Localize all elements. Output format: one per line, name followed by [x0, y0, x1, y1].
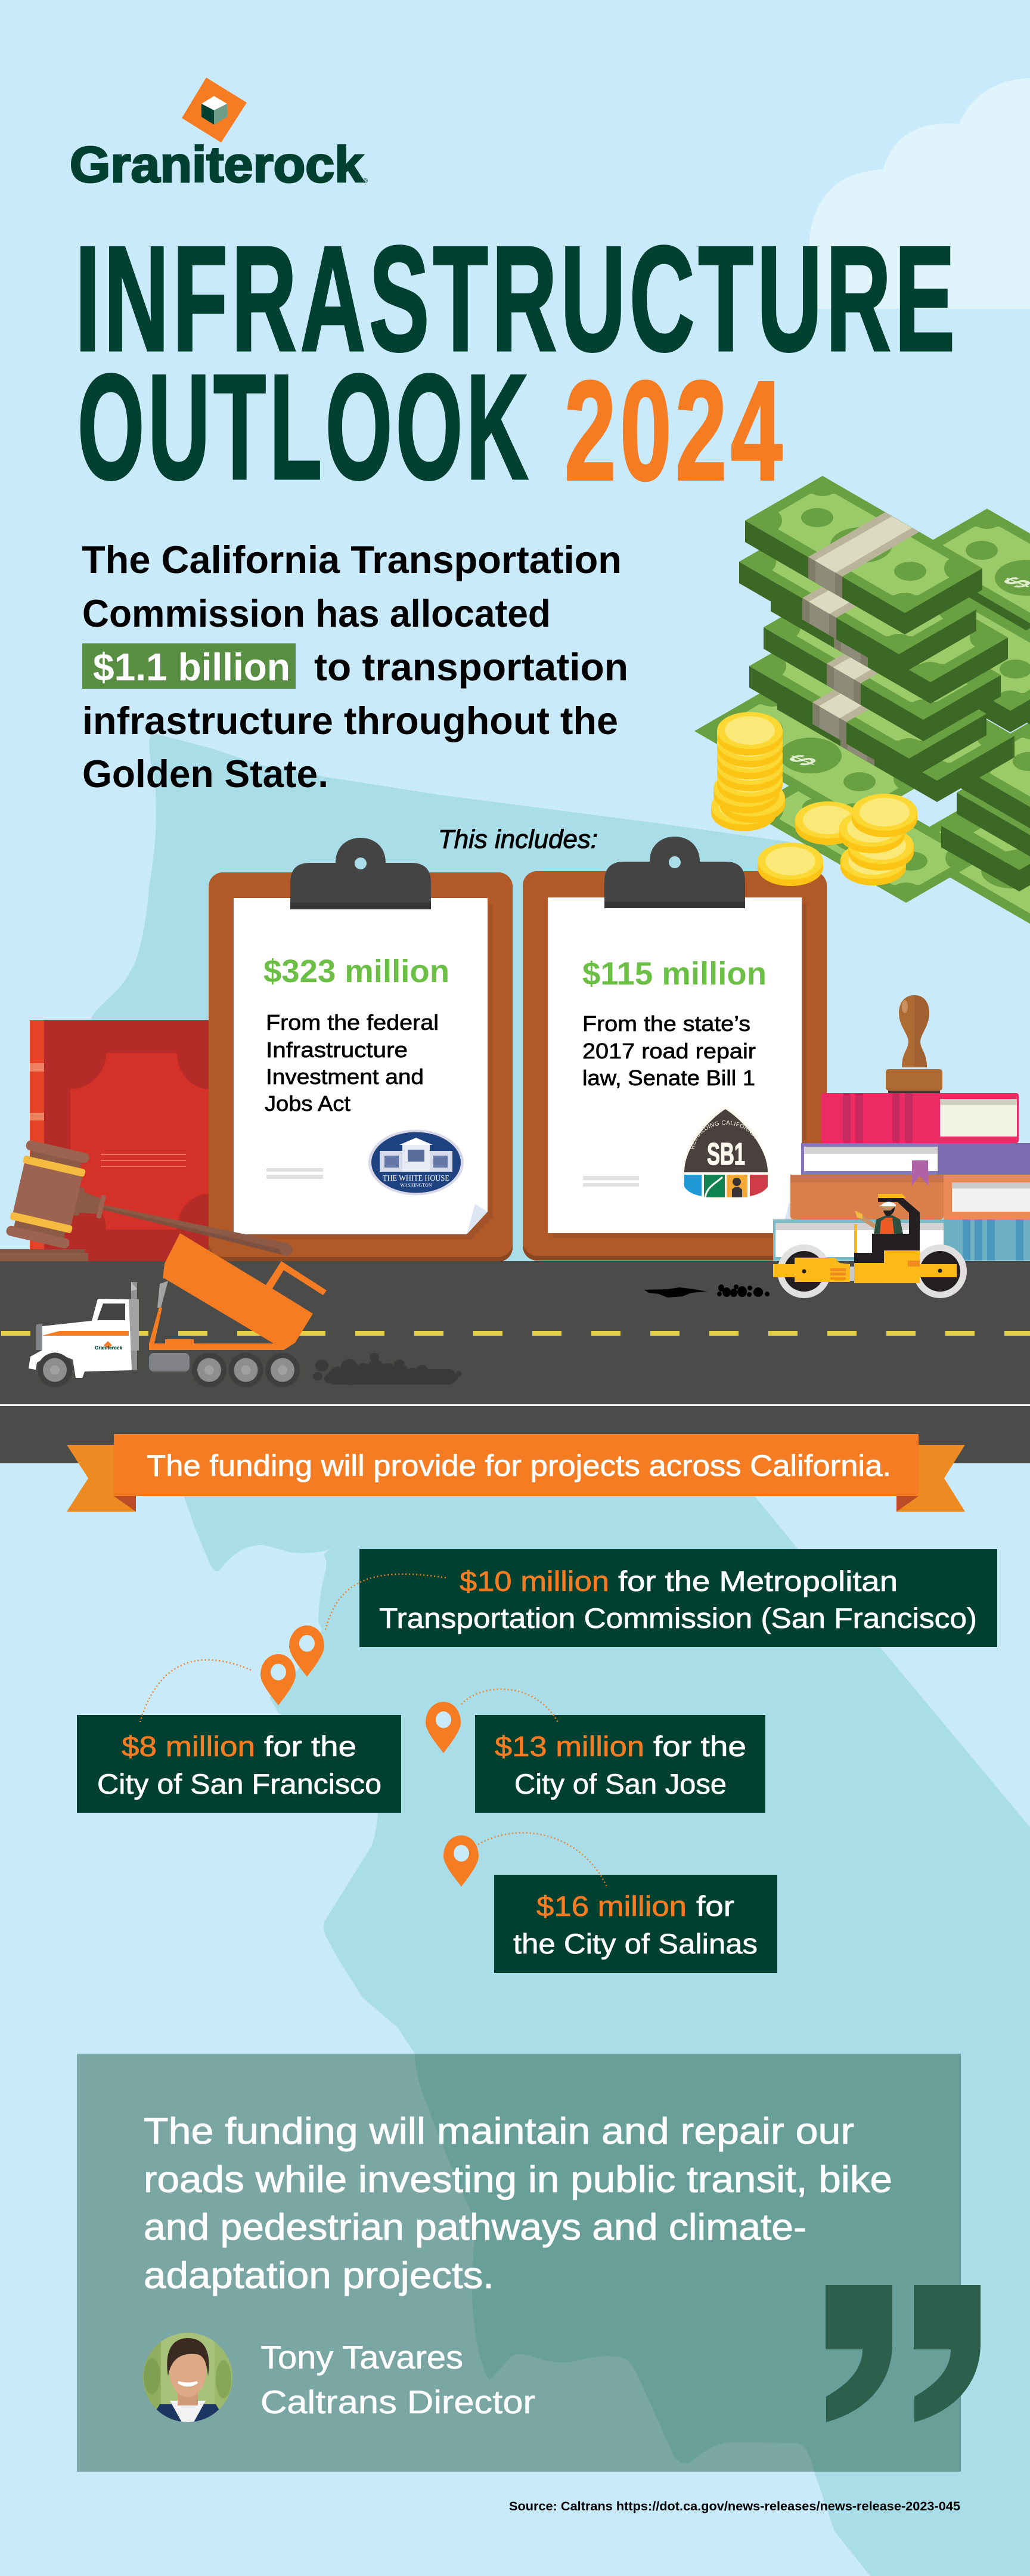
description: Jobs Act [265, 1091, 350, 1116]
clipboard clip [290, 838, 431, 909]
description: Infrastructure [266, 1038, 408, 1062]
callout: San Jose funding [475, 1715, 765, 1813]
quote text [144, 2111, 892, 2296]
callout: Salinas funding: the City of Salinas [513, 1928, 758, 1959]
quote text: The funding will maintain and repair our [144, 2111, 854, 2152]
intro paragraph: to transportation [314, 645, 628, 689]
quote text: adaptation projects. [144, 2255, 494, 2296]
description: From the federal [266, 1010, 439, 1035]
callout: MTC funding: Transportation Commission (San Francisco) [379, 1602, 977, 1634]
icon: driver [855, 1202, 903, 1234]
clipboard clip [604, 837, 745, 908]
illustration: stacks of money [694, 476, 1030, 939]
quote text: roads while investing in public transit, bike [144, 2159, 892, 2200]
logo: Graniterock [70, 78, 368, 193]
speaker name: Tony Tavares [260, 2339, 463, 2376]
title [75, 215, 958, 510]
icon: wooden stamp [886, 995, 942, 1093]
logo: Graniterock: ® [363, 178, 368, 185]
description: law, Senate Bill 1 [582, 1066, 755, 1090]
amount: $115 million [582, 956, 767, 992]
illustration: gavel [0, 1140, 303, 1299]
source note: Source: Caltrans https://dot.ca.gov/news-releases/news-release-2023-045 [509, 2500, 960, 2513]
callout: San Francisco funding: for the [264, 1730, 356, 1762]
illustration: pothole crack and fresh gravel [644, 1284, 770, 1298]
icon: SB1 badge: REBUILDING CALIFORNIA [690, 1120, 757, 1150]
description [582, 1011, 756, 1090]
callout: San Francisco funding: City of San Francisco [97, 1768, 381, 1800]
callout: Salinas funding: $16 million [536, 1890, 687, 1922]
callout: MTC funding: $10 million [460, 1565, 609, 1597]
icon: White House seal [368, 1129, 464, 1195]
map pins [260, 1626, 479, 1887]
intro paragraph: Golden State. [82, 752, 328, 795]
icon: SB1 badge [682, 1106, 770, 1199]
callout: San Francisco funding: $8 million [122, 1730, 255, 1762]
icon: White House seal: WASHINGTON [400, 1182, 432, 1188]
callout: MTC funding [359, 1549, 997, 1647]
callout: MTC funding: for the Metropolitan [618, 1565, 898, 1597]
icon: White House seal: THE WHITE HOUSE [383, 1174, 449, 1183]
panel: clipboard federal funding [209, 838, 513, 1262]
illustration: red law book [30, 1020, 209, 1261]
portrait [143, 2333, 232, 2422]
dotted connector lines [140, 1574, 607, 1888]
illustration: gravel pile [313, 1353, 462, 1385]
illustration: gold coins [711, 712, 917, 886]
California map silhouette [89, 734, 1030, 2576]
intro paragraph: The California Transportation [82, 538, 622, 581]
panel: clipboard state funding [523, 837, 827, 1261]
intro paragraph: $1.1 billion [93, 645, 290, 689]
panel: quote [77, 2054, 981, 2472]
description: From the state’s [582, 1011, 750, 1036]
illustration: road roller with driver [773, 1194, 967, 1298]
icon: closing quotation marks [826, 2285, 981, 2422]
banner [67, 1434, 965, 1512]
speaker name: Caltrans Director [260, 2383, 535, 2420]
text: this includes: This includes: [438, 825, 598, 854]
cloud [809, 78, 1030, 309]
logo: Graniterock: Graniterock [70, 137, 364, 193]
illustration: book stack with stamp [773, 995, 1030, 1261]
illustration: stacks of money: $ [781, 751, 826, 769]
callout: San Jose funding: $13 million [495, 1730, 644, 1762]
description: Investment and [266, 1064, 424, 1089]
amount: $323 million [263, 953, 449, 989]
description [265, 1010, 439, 1116]
callout: San Jose funding: for the [653, 1730, 746, 1762]
speaker name [260, 2339, 535, 2420]
quote text: and pedestrian pathways and climate- [144, 2207, 806, 2248]
illustration: dump truck [29, 1233, 327, 1387]
icon: SB1 badge: SB1 [707, 1137, 745, 1172]
illustration: dump truck: Graniterock [95, 1345, 123, 1351]
callout: Salinas funding: for [696, 1890, 734, 1922]
description: 2017 road repair [582, 1039, 756, 1063]
intro paragraph [82, 538, 628, 795]
road [0, 1261, 1030, 1463]
banner: The funding will provide for projects across California. [147, 1449, 891, 1482]
intro paragraph: Commission has allocated [82, 592, 551, 635]
callout: Salinas funding [494, 1875, 777, 1973]
callout: San Francisco funding [77, 1715, 401, 1813]
callout: San Jose funding: City of San Jose [514, 1768, 727, 1800]
intro paragraph: infrastructure throughout the [82, 699, 618, 742]
